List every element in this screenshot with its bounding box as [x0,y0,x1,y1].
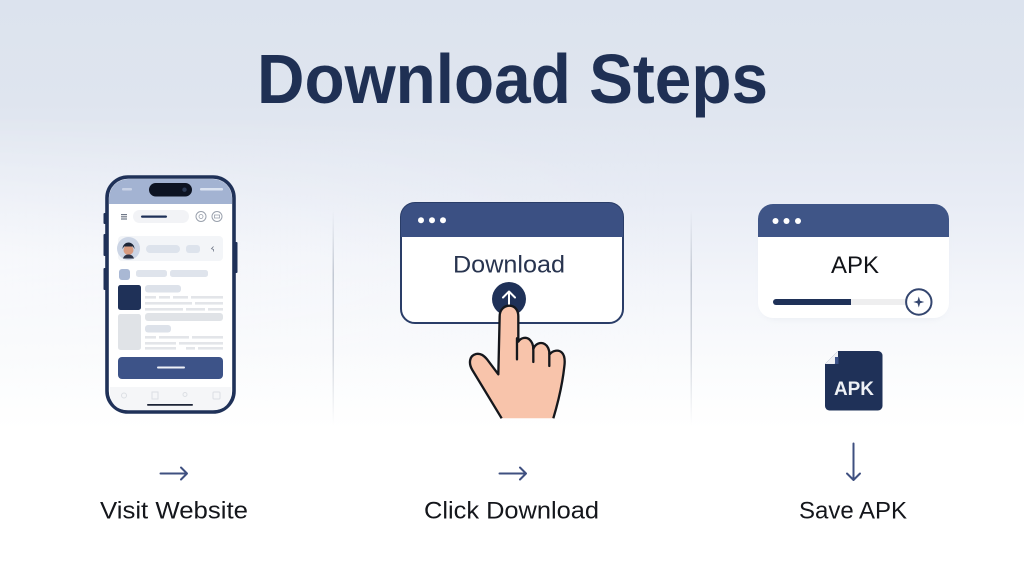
download button icon [492,282,526,316]
phone side buttons [104,213,238,290]
phone article one [118,285,223,311]
phone list heading row [119,269,208,280]
label: visit website: Visit Website [100,498,248,524]
step 2: browser window with download button [401,203,623,418]
title: Download Steps [257,40,768,118]
arrow: step 3 [847,444,860,480]
button label: Download [453,252,565,278]
window label: APK [831,252,879,279]
icon: APK file [825,351,882,410]
window body [758,204,949,318]
phone profile card [117,236,223,261]
page background [0,0,1024,340]
icon: APK file: APK [834,379,874,400]
arrow: step 2 [500,468,526,480]
browser title bar [401,203,623,237]
phone article two [118,313,223,350]
phone body [107,177,234,412]
window shadow [760,210,947,320]
window title bar [758,204,949,237]
phone search bar [121,210,222,223]
browser body [401,203,623,323]
phone bottom navigation [110,387,231,410]
phone action button [118,357,223,379]
step 1: phone illustration [104,177,238,412]
phone status bar [109,179,232,204]
step 3: APK download window [758,204,949,320]
progress bar [773,289,932,315]
arrow: step 1 [160,468,187,480]
label: save apk: Save APK [799,498,907,524]
icon: pointing hand [470,306,565,418]
label: click download: Click Download [424,498,599,524]
